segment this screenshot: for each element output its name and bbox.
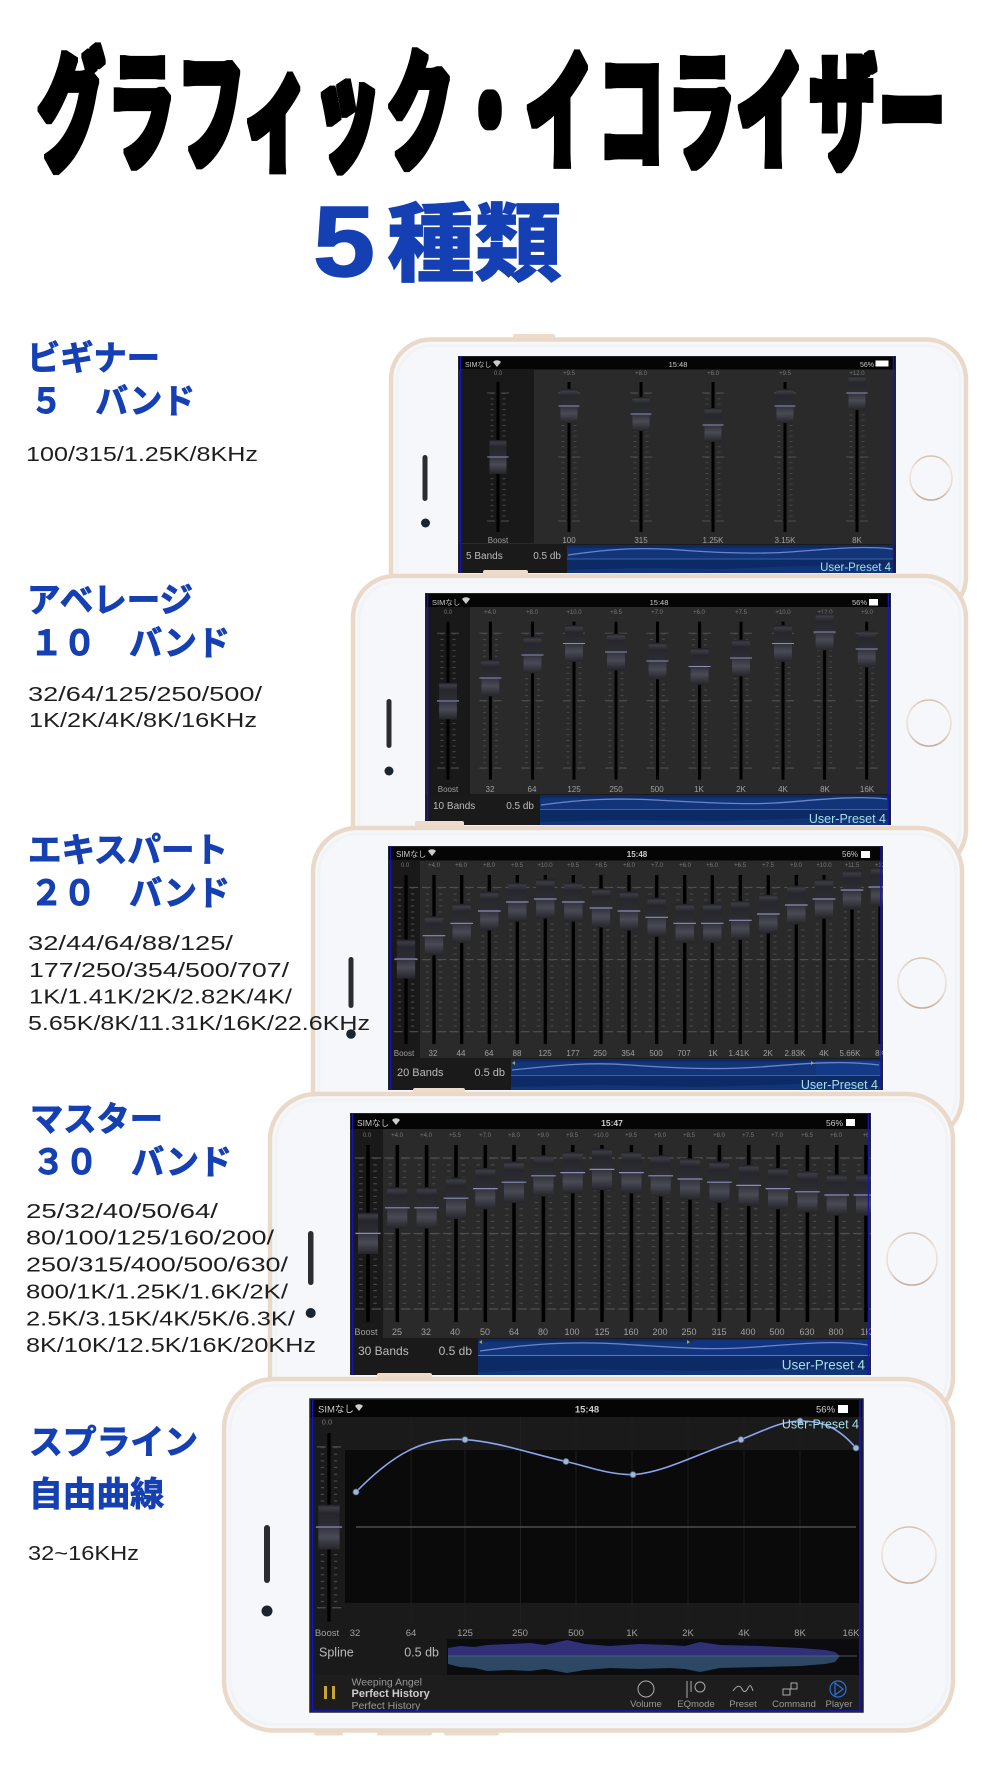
screen 5: 64 (406, 1628, 416, 1639)
boost fader (316, 1433, 342, 1622)
screen 3: 1K (708, 1049, 719, 1058)
screen 3: +6.0 (455, 863, 468, 869)
screen 3: +7.0 (651, 863, 664, 869)
screen 1: SIMなし (465, 361, 491, 369)
screen 4: +4.0 (420, 1133, 433, 1139)
phone 4: 30 band (270, 1088, 953, 1423)
screen 2: SIMなし (432, 598, 460, 607)
screen 2: +7.0 (651, 610, 664, 616)
screen 3: +7.5 (762, 863, 775, 869)
screen 2: 56% (852, 598, 867, 607)
screen 3: 500 (649, 1049, 663, 1058)
screen 2: 15:48 (650, 598, 668, 607)
screen 5: 1K (626, 1628, 638, 1639)
screen 3 (388, 846, 892, 1092)
screen 4: 25 (392, 1327, 402, 1337)
screen 3: 354 (621, 1049, 635, 1058)
screen 5: 0.0 (322, 1418, 332, 1426)
screen 4: 250 (681, 1327, 697, 1337)
screen 4: 500 (769, 1327, 785, 1337)
screen 4: 400 (740, 1327, 756, 1337)
title: グラフィック・イコライザー (38, 8, 945, 199)
screen 5: 16K (843, 1628, 860, 1639)
section 5 text: スプライン (29, 1424, 198, 1462)
screen 4 (350, 1113, 879, 1376)
screen 4: +9.5 (566, 1133, 579, 1139)
section 2 text: 1K/2K/4K/8K/16KHz (29, 709, 257, 732)
section 4 text: 250/315/400/500/630/ (26, 1254, 288, 1276)
screen 4: 315 (711, 1327, 727, 1337)
waveform (478, 1339, 870, 1376)
section 5 text: 自由曲線 (29, 1476, 164, 1514)
screen 5: 15:48 (575, 1404, 599, 1416)
screen 3: 5.66K (840, 1049, 861, 1058)
screen 5: User-Preset 4 (782, 1418, 859, 1432)
phone 1: 5 band (391, 334, 966, 616)
player bar: Perfect History (352, 1700, 421, 1712)
screen 4: +9.5 (625, 1133, 638, 1139)
screen 1: 1.25K (703, 536, 724, 545)
section 4 text: 2.5K/3.15K/4K/5K/6.3K/ (26, 1308, 295, 1330)
player bar: Volume (630, 1699, 662, 1710)
screen 4: +8.5 (683, 1133, 696, 1139)
screen 2: 500 (650, 785, 664, 794)
icon: preset (733, 1686, 753, 1692)
screen 2: 64 (528, 785, 537, 794)
section 3 text: 32/44/64/88/125/ (28, 932, 233, 955)
screen 5: 8K (794, 1628, 806, 1639)
screen 2: +8.0 (526, 610, 539, 616)
section 2 text: １０ バンド (30, 625, 230, 663)
screen 5: 4K (738, 1628, 750, 1639)
waveform (567, 545, 894, 574)
screen 1: 15:48 (669, 360, 687, 369)
screen 4: +6.0 (830, 1133, 843, 1139)
section 5 text: 32~16KHz (28, 1542, 139, 1565)
screen 4: 32 (421, 1327, 431, 1337)
screen 4: +5.5 (449, 1133, 462, 1139)
screen 3: 177 (566, 1049, 580, 1058)
screen 4: 15:47 (601, 1118, 623, 1128)
player bar: Player (826, 1699, 852, 1710)
screen 3: Boost (394, 1049, 415, 1058)
screen 1: Boost (488, 536, 509, 545)
screen 4: +7.0 (479, 1133, 492, 1139)
screen 3: User-Preset 4 (801, 1078, 878, 1092)
phone 3: 20 band (313, 821, 962, 1141)
spline chart (345, 1417, 860, 1625)
screen 1: User-Preset 4 (820, 562, 892, 574)
screen 4: 630 (799, 1327, 815, 1337)
section 1 text: 100/315/1.25K/8KHz (26, 443, 258, 466)
screen 3: +8.0 (483, 863, 496, 869)
screen 4: 0.0 (363, 1133, 372, 1139)
screen 3: +8.5 (595, 863, 608, 869)
screen 3: 15:48 (627, 850, 648, 859)
section 1 text: ビギナー (27, 340, 160, 378)
screen 5: 2K (682, 1628, 694, 1639)
screen 3: 2.83K (785, 1049, 806, 1058)
screen 4: SIMなし (357, 1118, 389, 1128)
screen 4: 1K (860, 1327, 872, 1337)
screen 3: +10.0 (816, 863, 832, 869)
section 3 text: ２０ バンド (30, 875, 230, 913)
section 4 text: 80/100/125/160/200/ (26, 1226, 274, 1250)
screen 3: 64 (485, 1049, 494, 1058)
screen 2: +10.0 (775, 610, 791, 616)
screen 2: +7.5 (735, 610, 748, 616)
screen 5: 32 (350, 1628, 360, 1639)
screen 4: Boost (354, 1327, 378, 1337)
screen 4: 64 (509, 1327, 519, 1337)
screen 3: +4.0 (428, 863, 441, 869)
screen 3: 88 (513, 1049, 522, 1058)
screen 4: 56% (826, 1118, 843, 1128)
screen 3: 32 (429, 1049, 438, 1058)
screen 1: 100 (562, 536, 576, 545)
screen 4: 200 (652, 1327, 668, 1337)
screen 1: 56% (860, 362, 874, 369)
screen 2: 125 (567, 785, 581, 794)
screen 3: +8.0 (623, 863, 636, 869)
screen 3: 0.5 db (474, 1067, 505, 1079)
screen 5: SIMなし (318, 1404, 354, 1416)
screen 3: +10.0 (537, 863, 553, 869)
screen 2: 0.0 (444, 610, 453, 616)
subtitle: 種類 (387, 174, 562, 299)
screen 3: 707 (677, 1049, 691, 1058)
screen 3: SIMなし (396, 850, 426, 859)
subtitle (313, 174, 562, 299)
player bar: Preset (729, 1699, 757, 1710)
screen 1: +12.0 (849, 371, 865, 377)
screen 3: 250 (593, 1049, 607, 1058)
screen 4: 800 (828, 1327, 844, 1337)
icon: volume (638, 1681, 654, 1697)
screen 4: 0.5 db (439, 1344, 472, 1358)
screen 2: +4.0 (484, 610, 497, 616)
section 3 text: エキスパート (28, 832, 228, 870)
screen 3: 4K (819, 1049, 830, 1058)
section 5 text (28, 1424, 198, 1565)
icon: EQmode (687, 1681, 705, 1698)
screen 5: 56% (816, 1404, 836, 1416)
screen 3: 20 Bands (397, 1067, 444, 1079)
screen 1: 8K (852, 536, 863, 545)
screen 5: Spline (319, 1646, 354, 1660)
screen 3: +9.5 (567, 863, 580, 869)
screen 5: 500 (568, 1628, 584, 1639)
screen 4: +7.5 (742, 1133, 755, 1139)
faders (487, 376, 868, 532)
section 2 text: 32/64/125/250/500/ (28, 683, 262, 706)
screen 4: +8.0 (713, 1133, 726, 1139)
screen 3: 44 (457, 1049, 466, 1058)
screen 4: 40 (450, 1327, 460, 1337)
screen 2: 0.5 db (506, 801, 534, 812)
section 3 text: 1K/1.41K/2K/2.82K/4K/ (29, 986, 292, 1008)
screen 5: Boost (315, 1628, 340, 1639)
screen 2: +6.0 (693, 610, 706, 616)
waveform (447, 1639, 859, 1675)
screen 3: +6.0 (706, 863, 719, 869)
phone 2: 10 band (353, 570, 966, 871)
screen 4: 50 (480, 1327, 490, 1337)
screen 3: +6.5 (734, 863, 747, 869)
screen 2: User-Preset 4 (809, 812, 886, 826)
screen 3: 1.41K (729, 1049, 750, 1058)
screen 2: 2K (736, 785, 747, 794)
screen 2: Boost (438, 785, 459, 794)
screen 1: +6.0 (707, 371, 720, 377)
faders (355, 1145, 879, 1322)
screen 1: +9.5 (563, 371, 576, 377)
section 1 text: ５ バンド (30, 383, 195, 421)
section 2 text: アベレージ (27, 582, 193, 620)
screen 3: +11.5 (845, 863, 860, 869)
screen 5: 125 (457, 1628, 473, 1639)
screen 3: +12 (875, 863, 886, 869)
section 3 text: 5.65K/8K/11.31K/16K/22.6KHz (28, 1012, 370, 1035)
section 4 text: 8K/10K/12.5K/16K/20KHz (26, 1334, 316, 1357)
faders (437, 614, 878, 780)
screen 5 (310, 1399, 863, 1712)
section 1 text (26, 340, 258, 466)
section 4 text: ３０ バンド (32, 1144, 232, 1182)
screen 3: +6.0 (679, 863, 692, 869)
screen 1: +8.0 (635, 371, 648, 377)
player bar: Command (772, 1699, 816, 1710)
player bar: EQmode (677, 1699, 715, 1710)
screen 2: 250 (609, 785, 623, 794)
screen 5: 250 (512, 1628, 528, 1639)
screen 1: 5 Bands (466, 551, 503, 562)
screen 4: 80 (538, 1327, 548, 1337)
section 4 text: 800/1K/1.25K/1.6K/2K/ (26, 1280, 288, 1304)
screen 4: +10.0 (593, 1133, 609, 1139)
waveform (511, 1059, 881, 1091)
section 3 text: 177/250/354/500/707/ (29, 959, 289, 982)
screen 4: 30 Bands (358, 1344, 409, 1358)
screen 4: +6.5 (801, 1133, 814, 1139)
icon: command (783, 1683, 797, 1695)
screen 3: 8K (875, 1049, 886, 1058)
screen 1: 0.5 db (533, 551, 561, 562)
waveform (540, 795, 889, 825)
screen 1 (458, 356, 896, 574)
screen 3: 2K (763, 1049, 774, 1058)
screen 4: +4.0 (391, 1133, 404, 1139)
screen 4: +7.0 (771, 1133, 784, 1139)
screen 4: +9.0 (537, 1133, 550, 1139)
screen 3: 125 (538, 1049, 552, 1058)
screen 2: 16K (860, 785, 875, 794)
screen 2: 8K (820, 785, 831, 794)
screen 3: +9.5 (511, 863, 524, 869)
section 2 text (27, 582, 262, 732)
phone 5: spline (224, 1373, 953, 1736)
screen 4: 160 (623, 1327, 639, 1337)
screen 4: +8.0 (508, 1133, 521, 1139)
screen 1: 315 (634, 536, 648, 545)
screen 3: 0.0 (401, 863, 410, 869)
screen 2: +10.0 (566, 610, 582, 616)
screen 2: 10 Bands (433, 801, 475, 812)
screen 4: +6 (863, 1133, 870, 1139)
screen 4: 100 (564, 1327, 580, 1337)
screen 5: 0.5 db (404, 1646, 439, 1660)
screen 4: +9.0 (654, 1133, 667, 1139)
screen 2: +8.5 (610, 610, 623, 616)
section 3 text (28, 832, 370, 1035)
faders (394, 867, 892, 1044)
screen 2: 4K (778, 785, 789, 794)
screen 3: +9.0 (790, 863, 803, 869)
subtitle: 5 (313, 186, 375, 298)
player bar: Weeping Angel (352, 1676, 422, 1688)
screen 3: 56% (842, 850, 858, 859)
screen 2: 1K (694, 785, 705, 794)
screen 2 (425, 593, 891, 826)
section 4 text: マスター (30, 1101, 163, 1139)
screen 2: 32 (486, 785, 495, 794)
section 4 text: 25/32/40/50/64/ (26, 1200, 218, 1223)
screen 4: 125 (594, 1327, 610, 1337)
screen 1: 3.15K (775, 536, 796, 545)
icon: player (830, 1681, 846, 1697)
screen 1: 0.0 (494, 371, 503, 377)
screen 1: +9.5 (779, 371, 792, 377)
screen 4: User-Preset 4 (782, 1358, 865, 1372)
screen 2: +9.0 (861, 610, 874, 616)
screen 2: +12.0 (817, 610, 833, 616)
player bar (311, 1675, 862, 1712)
player bar: Perfect History (352, 1688, 431, 1700)
section 4 text (26, 1101, 316, 1357)
